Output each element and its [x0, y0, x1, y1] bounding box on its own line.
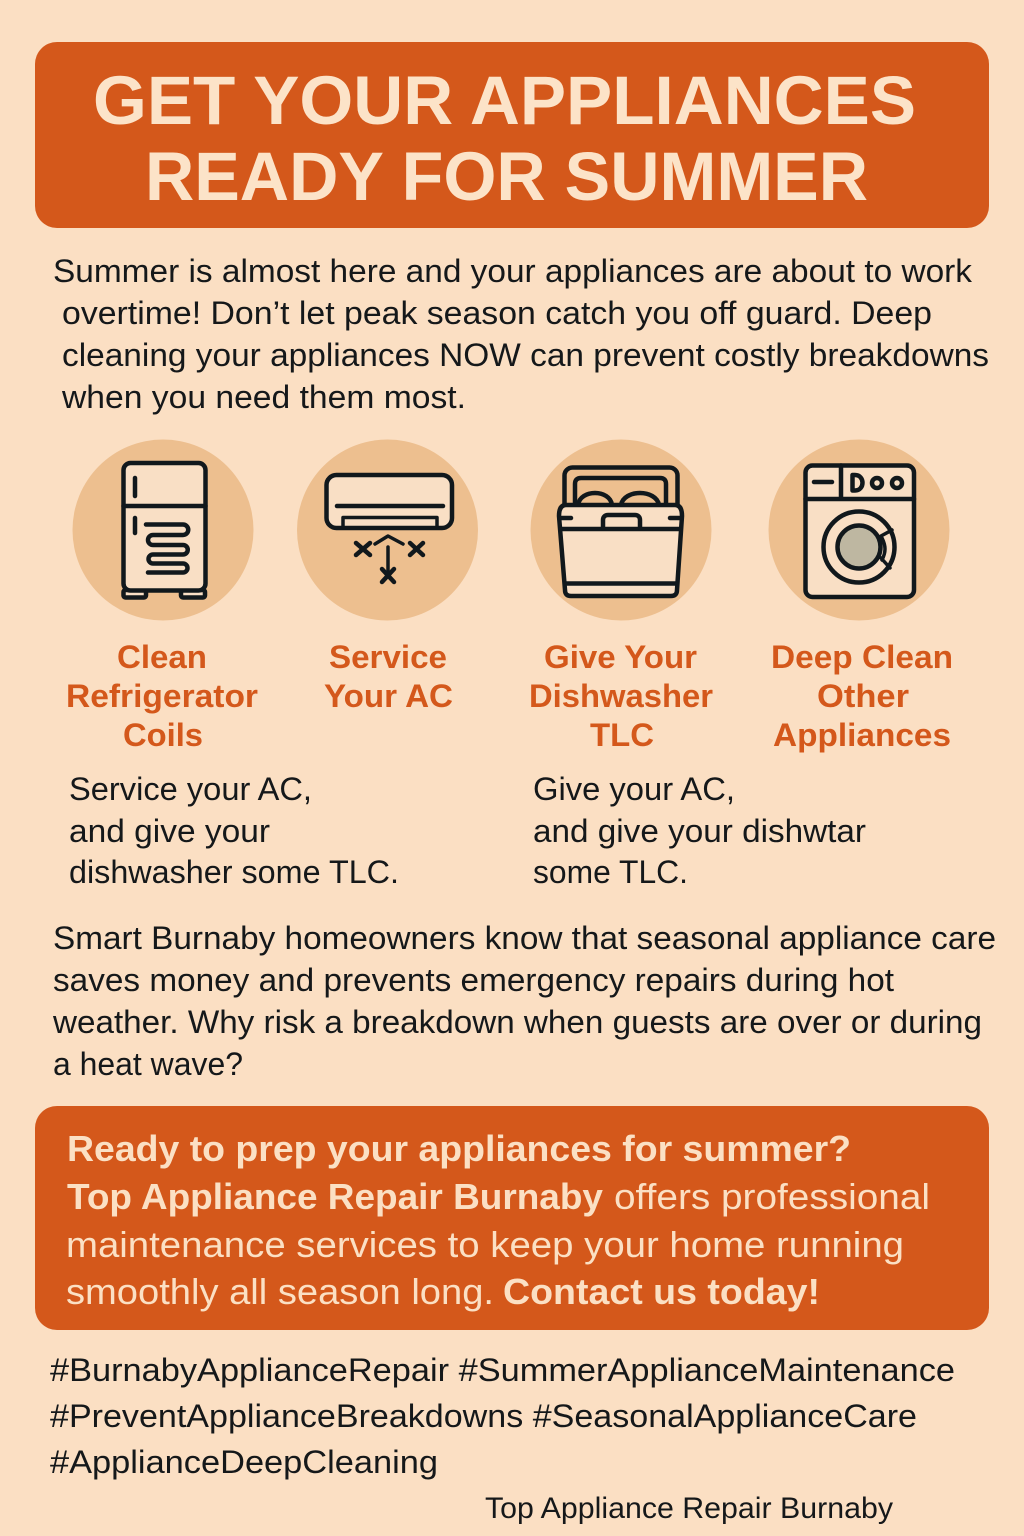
- footer company name: Top Appliance Repair Burnaby: [485, 1492, 893, 1525]
- heading: deep clean other appliances: Appliances: [773, 717, 951, 753]
- hashtags: #PreventApplianceBreakdowns #SeasonalApplianceCare: [50, 1398, 917, 1434]
- icon: washing machine: [768, 440, 950, 620]
- heading: deep clean other appliances: [771, 639, 953, 753]
- heading: service your AC: Service: [329, 639, 447, 675]
- body paragraph: [52, 920, 996, 1082]
- title banner: READY FOR SUMMER: [145, 138, 868, 215]
- heading: give your dishwasher TLC: Dishwasher: [529, 678, 713, 714]
- body paragraph: saves money and prevents emergency repairs during hot: [53, 962, 894, 998]
- text block: right column: Give your AC,: [533, 771, 735, 807]
- intro paragraph: cleaning your appliances NOW can prevent costly breakdowns: [62, 337, 989, 373]
- text block: left column: [69, 771, 399, 890]
- call to action panel: maintenance services to keep your home running: [66, 1224, 904, 1265]
- hashtags: [50, 1352, 955, 1480]
- heading: service your AC: [324, 639, 453, 714]
- heading: clean refrigerator coils: Clean: [117, 639, 207, 675]
- heading: give your dishwasher TLC: TLC: [590, 717, 654, 753]
- icon: air conditioner: [297, 440, 478, 620]
- text block: left column: and give your: [69, 813, 270, 849]
- heading: deep clean other appliances: Deep Clean: [771, 639, 953, 675]
- hashtags: #ApplianceDeepCleaning: [50, 1444, 438, 1480]
- text block: left column: Service your AC,: [69, 771, 312, 807]
- intro paragraph: Summer is almost here and your appliances are about to work: [53, 253, 973, 289]
- text block: left column: dishwasher some TLC.: [69, 854, 399, 890]
- call to action panel: Top Appliance Repair Burnaby: [67, 1176, 603, 1217]
- heading: service your AC: Your AC: [324, 678, 453, 714]
- call to action panel: [35, 1106, 989, 1330]
- call to action panel: smoothly all season long.: [66, 1271, 494, 1312]
- heading: clean refrigerator coils: Coils: [123, 717, 203, 753]
- icon: refrigerator: [72, 440, 254, 620]
- heading: clean refrigerator coils: [66, 639, 258, 753]
- call to action panel: Contact us today!: [503, 1271, 820, 1312]
- text block: right column: [533, 771, 866, 890]
- heading: give your dishwasher TLC: [529, 639, 713, 753]
- body paragraph: Smart Burnaby homeowners know that seasonal appliance care: [53, 920, 996, 956]
- intro paragraph: when you need them most.: [61, 379, 466, 415]
- intro paragraph: overtime! Don’t let peak season catch you off guard. Deep: [62, 295, 932, 331]
- call to action panel: offers professional: [614, 1176, 930, 1217]
- call to action panel: Ready to prep your appliances for summer?: [67, 1128, 851, 1169]
- body paragraph: weather. Why risk a breakdown when guests are over or during: [52, 1004, 982, 1040]
- hashtags: #BurnabyApplianceRepair #SummerApplianceMaintenance: [50, 1352, 955, 1388]
- heading: clean refrigerator coils: Refrigerator: [66, 678, 258, 714]
- title banner: GET YOUR APPLIANCES: [93, 62, 916, 139]
- body paragraph: a heat wave?: [53, 1046, 243, 1082]
- intro paragraph: [53, 253, 989, 415]
- text block: right column: and give your dishwtar: [533, 813, 866, 849]
- heading: deep clean other appliances: Other: [817, 678, 909, 714]
- heading: give your dishwasher TLC: Give Your: [544, 639, 697, 675]
- icon: dishwasher: [530, 440, 712, 620]
- text block: right column: some TLC.: [533, 854, 688, 890]
- title banner: [35, 42, 989, 228]
